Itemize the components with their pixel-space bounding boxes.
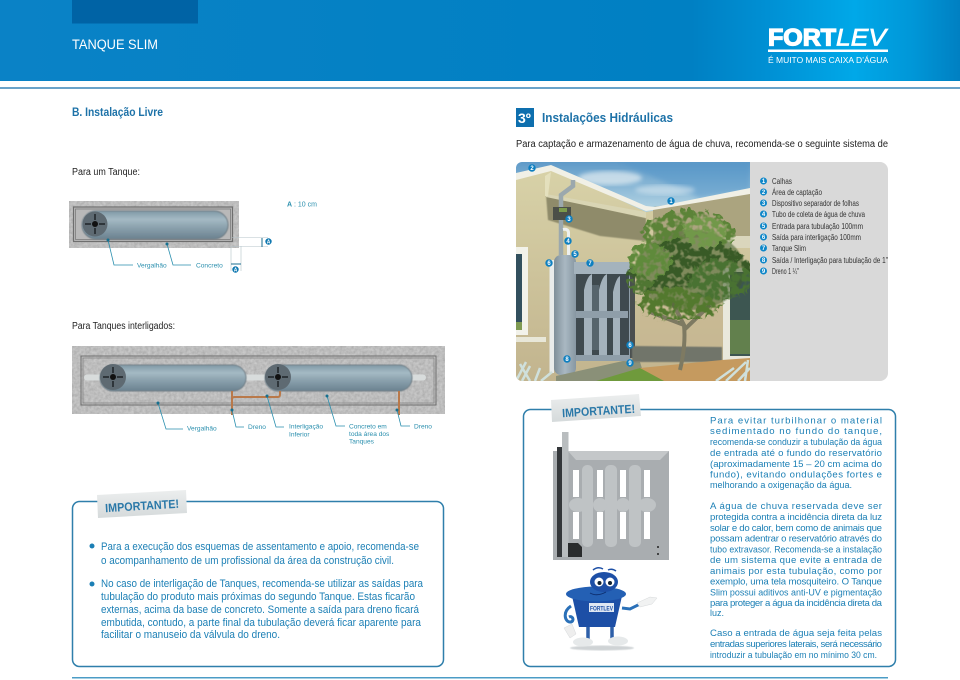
right text paragraph 1: recomenda-se conduzir a tubulação da água: [710, 437, 883, 448]
copper pipes: [232, 391, 399, 415]
bullet 2: embutida, contudo, a parte final da tubulação deverá ficar aparente para: [101, 617, 422, 629]
photo number badges: 7: [588, 261, 592, 267]
photo number badges: 5: [573, 252, 577, 258]
logo: Fortlev: FORT: [768, 24, 836, 52]
legend text: Dreno 1 ¼": [772, 267, 799, 276]
legend text: Entrada para tubulação 100mm: [772, 222, 863, 231]
bullet 2: [90, 578, 424, 641]
downspout and separator: [550, 180, 573, 373]
diagram: interconnected tanks plan: Inferior: [289, 432, 310, 438]
right text paragraph 2: [710, 501, 883, 619]
mascot: blue water tank character: [564, 568, 657, 650]
section heading: 3º Instalações Hidráulicas: [516, 108, 673, 127]
legend text: Saída / Interligação para tubulação de 1": [772, 256, 888, 265]
right text paragraph 3: Caso a entrada de água seja feita pelas: [710, 628, 882, 639]
slim tank: [554, 255, 635, 375]
diagram: interconnected tanks plan: toda área dos: [349, 431, 390, 438]
label: A 10 cm: A : 10 cm: [287, 202, 317, 208]
photo number badges: 2: [530, 166, 534, 172]
diagram: single tank plan: Vergalhão: [137, 262, 167, 270]
bullet 2: externas, acima da base de concreto. Somente a saída para dreno ficará: [101, 604, 420, 616]
diagram: interconnected tanks plan: Dreno: [248, 424, 266, 431]
subheading: Para um Tanque: Para um Tanque:: [72, 167, 140, 178]
diagram: single tank plan: Concreto: [196, 262, 223, 270]
panel: parts legend: 7: [762, 246, 766, 252]
legend text: Dispositivo separador de folhas: [772, 199, 859, 208]
mascot: blue water tank character: FORTLEV: [590, 606, 613, 612]
right text paragraph 2: para proteger a água da incidência direta da: [710, 598, 883, 609]
section heading: B. Instalação Livre: B. Instalação Livre: [72, 107, 163, 119]
right text paragraph 2: solar e do calor, bem como de animais que: [710, 523, 882, 534]
leaders: [108, 240, 191, 265]
right text paragraph 2: tubo extravasor. Recomenda-se a instalação: [710, 544, 882, 556]
legend text: Tanque Slim: [772, 244, 806, 253]
legend text: Área de captação: [772, 188, 823, 197]
right text paragraph 2: A água de chuva reservada deve ser: [710, 501, 883, 512]
legend text: [772, 177, 888, 276]
panel: important notes right: [524, 394, 896, 666]
intro text: Para captação e armazenamento de água de chuva, recomenda-se o seguinte sistema de: [516, 139, 888, 150]
right text paragraph 2: possam adentrar o reservatório através do: [710, 534, 882, 544]
bullet 2: facilitar o manuseio da válvula do dreno.: [101, 629, 280, 641]
bullet 2: tubulação do produto mais próximas do segundo Tanque. Estas ficarão: [101, 591, 415, 603]
photo number badges: [528, 164, 675, 367]
panel: parts legend: 1: [762, 179, 766, 185]
dimension A markers: A: [234, 268, 238, 274]
diagram: interconnected tanks plan: Vergalhão: [187, 426, 217, 432]
photo number badges: 9: [628, 361, 632, 367]
legend text: Saída para interligação 100mm: [772, 233, 861, 242]
footer rule: [72, 677, 888, 678]
section heading: 3º Instalações Hidráulicas: 3º: [518, 110, 531, 126]
subheading: Para Tanques interligados: Para Tanques interligados:: [72, 321, 175, 332]
logo: Fortlev: LEV: [836, 24, 888, 52]
tank cutaway illustration: [553, 432, 669, 560]
right text paragraph 1: melhorando a oxigenação da água.: [710, 480, 852, 491]
panel: parts legend: 9: [762, 269, 766, 275]
dimension A markers: [231, 238, 272, 274]
panel: parts legend: 4: [762, 212, 766, 218]
right text paragraph 1: (aproximadamente 15 – 20 cm acima do: [710, 459, 882, 470]
bullet 1: [90, 541, 419, 567]
legend bullets: [760, 178, 767, 274]
panel: parts legend: 5: [762, 224, 766, 230]
right window: [723, 268, 750, 360]
panel: important notes left: [72, 490, 444, 666]
panel: parts legend: [750, 162, 888, 381]
panel: parts legend: 8: [762, 258, 766, 264]
panel: parts legend: 6: [762, 235, 766, 241]
header band: [0, 0, 960, 89]
right text paragraph 2: de um sistema que evite a entrada de: [710, 555, 882, 566]
right text paragraph 3: introduzir a tubulação em no mínimo 30 cm.: [710, 650, 877, 661]
dimension A markers: A: [267, 240, 271, 246]
diagram: interconnected tanks plan: Concreto em: [349, 424, 387, 430]
right text paragraph 2: Slim possui aditivos anti-UV e pigmentação: [710, 588, 882, 598]
logo: Fortlev: [768, 24, 888, 65]
panel: parts legend: 2: [762, 190, 766, 196]
photo number badges: 3: [567, 217, 571, 223]
photo number badges: 4: [566, 239, 570, 245]
bullet 1: o acompanhamento de um profissional da área da construção civil.: [101, 555, 394, 567]
tag: importante: IMPORTANTE!: [562, 402, 635, 420]
right text paragraph 1: [710, 416, 883, 491]
diagram: single tank plan: [69, 201, 272, 274]
tag: importante: IMPORTANTE!: [105, 497, 179, 515]
right text paragraph 1: Para evitar turbilhonar o material: [710, 416, 882, 426]
right text paragraph 1: fundo), evitando ondulações fortes e: [710, 470, 882, 480]
photo number badges: 1: [669, 199, 673, 205]
page title: TANQUE SLIM: [72, 37, 158, 52]
tag: importante: [97, 490, 187, 518]
right text paragraph 2: exemplo, uma tela mosquiteiro. O Tanque: [710, 576, 882, 588]
photo: house with rainwater tank: [516, 162, 752, 381]
legend text: Tubo de coleta de água de chuva: [772, 210, 866, 219]
bullet 2: No caso de interligação de Tanques, recomenda-se utilizar as saídas para: [101, 578, 424, 590]
logo: Fortlev: É MUITO MAIS CAIXA D’ÁGUA: [768, 55, 888, 65]
legend text: Calhas: [772, 177, 792, 186]
ground and base: [516, 346, 750, 381]
tree: [628, 210, 752, 370]
photo number badges: 6: [547, 261, 551, 267]
right text paragraph 2: luz.: [710, 608, 724, 619]
diagram: interconnected tanks plan: Interligação: [289, 424, 323, 430]
panel: parts legend: 3: [762, 201, 766, 207]
right text paragraph 2: protegida contra a incidência direta da luz: [710, 512, 882, 523]
right text paragraph 3: entradas superiores laterais, será necessário: [710, 639, 882, 650]
photo number badges: 8: [565, 357, 569, 363]
photo number badges: 6: [628, 343, 632, 349]
diagram: interconnected tanks plan: Dreno: [414, 424, 432, 430]
tag: importante: [551, 394, 641, 422]
diagram: interconnected tanks plan: Tanques: [349, 438, 375, 446]
diagram: interconnected tanks plan: [72, 346, 445, 446]
right text paragraph 1: de entrada até o fundo do reservatório: [710, 448, 882, 459]
right text paragraph 1: sedimentado no fundo do tanque,: [710, 426, 882, 437]
bullet 1: Para a execução dos esquemas de assentamento e apoio, recomenda-se: [101, 541, 419, 553]
right text paragraph 2: animais por esta tubulação, como por: [710, 566, 883, 577]
section heading: 3º Instalações Hidráulicas: Instalações Hidráulicas: [542, 111, 673, 125]
leaders: [158, 396, 410, 429]
left window: [516, 247, 546, 342]
right text paragraph 3: [710, 628, 882, 661]
